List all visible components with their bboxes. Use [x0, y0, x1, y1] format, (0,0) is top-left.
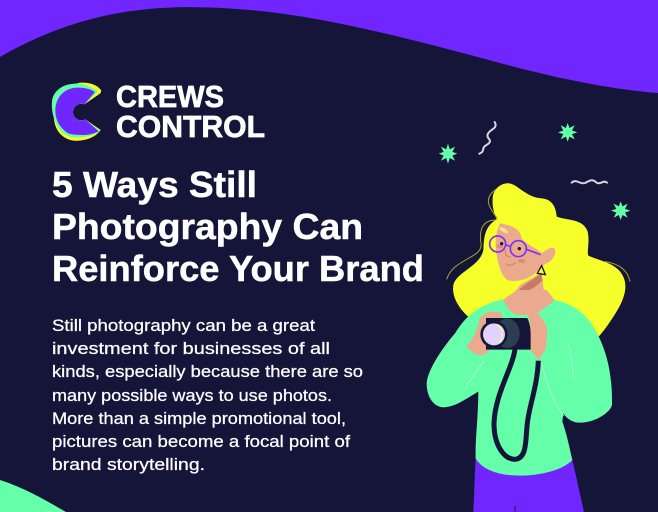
intro paragraph: many possible ways to use photos. [52, 387, 332, 405]
hair strands [447, 189, 630, 282]
logo icon [52, 83, 101, 141]
title: Reinforce Your Brand [52, 248, 424, 289]
mouth and nose [505, 250, 515, 265]
sleeve folds [466, 343, 574, 416]
icon: horizontal squiggle [572, 180, 607, 183]
trouser seam [513, 506, 516, 512]
logo wordmark: CREWS [116, 79, 224, 114]
top purple wave [0, 0, 658, 93]
left hand [467, 312, 503, 355]
intro paragraph: Still photography can be a great [52, 317, 315, 335]
body [427, 290, 612, 512]
earring [537, 266, 545, 275]
intro paragraph: brand storytelling. [52, 456, 205, 474]
intro paragraph [52, 317, 363, 474]
logo wordmark: CONTROL [116, 109, 265, 144]
hair [447, 183, 630, 340]
icon: sparkle right [611, 201, 630, 220]
title [52, 164, 424, 289]
title: Photography Can [52, 206, 363, 247]
neck [505, 273, 555, 323]
intro paragraph: pictures can become a focal point of [52, 433, 350, 451]
intro paragraph: investment for businesses of all [52, 340, 330, 358]
sweater [427, 299, 612, 476]
head and neck [490, 223, 555, 323]
face [496, 223, 555, 281]
logo wordmark [116, 79, 265, 144]
camera body [486, 318, 531, 350]
icon: vertical squiggle [479, 122, 496, 154]
cheeks [496, 244, 504, 248]
intro paragraph: More than a simple promotional tool, [52, 410, 346, 428]
icon: sparkle left [439, 144, 457, 164]
icon: sparkle top [558, 123, 577, 142]
title: 5 Ways Still [52, 164, 257, 205]
camera strap [494, 349, 538, 459]
decorative sparkles and squiggles [439, 122, 630, 220]
eyes [500, 242, 503, 245]
bottom-left green wave [0, 480, 66, 512]
intro paragraph: kinds, especially because there are so [52, 363, 363, 381]
chest skin [503, 290, 555, 315]
camera lens [495, 319, 520, 348]
right hand [527, 311, 547, 360]
illustration: woman with camera [427, 183, 630, 512]
trousers [473, 457, 584, 512]
glasses [490, 236, 541, 257]
